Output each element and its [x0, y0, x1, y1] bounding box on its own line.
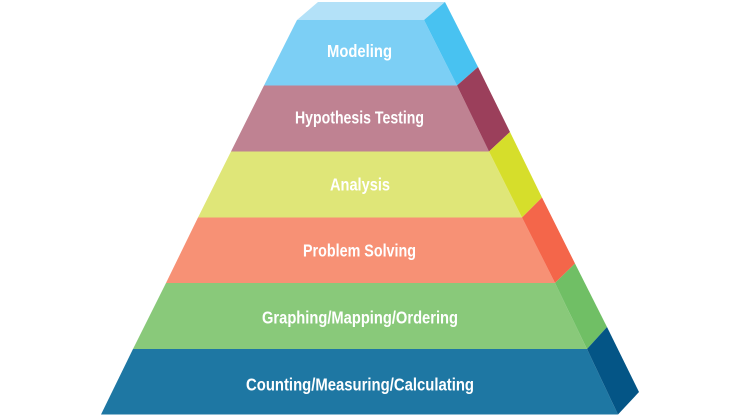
tier: Hypothesis Testing [231, 67, 510, 152]
tier: Analysis [198, 132, 542, 218]
top face of pyramid [297, 2, 445, 20]
tier: Hypothesis Testing: Hypothesis Testing [295, 108, 424, 128]
tier: Counting/Measuring/Calculating: Counting/Measuring/Calculating [246, 374, 474, 394]
tier: Graphing/Mapping/Ordering: Graphing/Mapping/Ordering [262, 308, 458, 328]
tier: Graphing/Mapping/Ordering [133, 264, 607, 349]
tier: Problem Solving [166, 198, 575, 283]
tier: Modeling: Modeling [327, 41, 392, 61]
tier: Problem Solving: Problem Solving [303, 240, 416, 260]
tier: Counting/Measuring/Calculating [101, 327, 639, 414]
tier: Analysis: Analysis [330, 174, 390, 194]
tier: Modeling [264, 2, 478, 86]
